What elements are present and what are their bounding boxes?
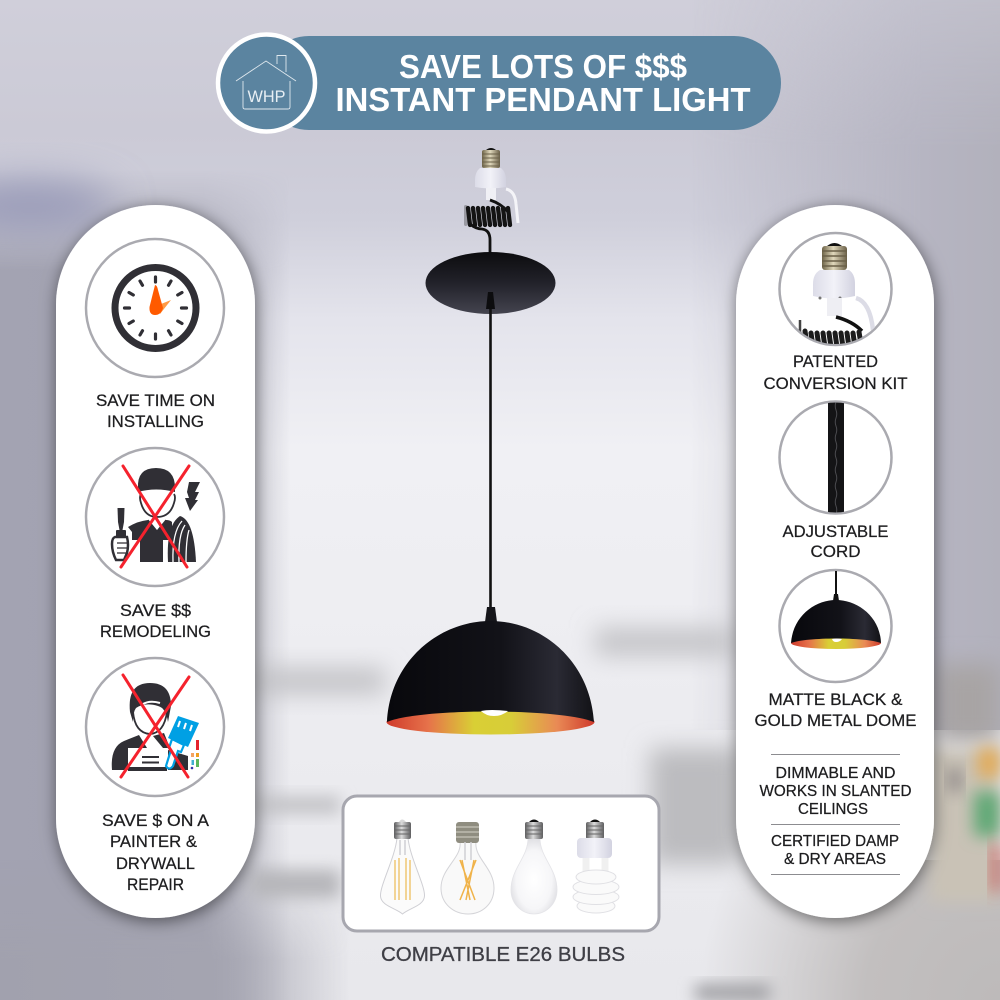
panel: right features bbox=[736, 205, 934, 918]
conversion kit bbox=[464, 148, 518, 254]
dome shade bbox=[386, 607, 594, 734]
photo: dome bbox=[780, 570, 892, 682]
banner bbox=[218, 34, 781, 132]
label: dimmable: CEILINGS bbox=[798, 801, 868, 818]
label: save on painter: PAINTER & bbox=[110, 832, 198, 851]
label: conversion kit: CONVERSION KIT bbox=[764, 374, 908, 393]
title: INSTANT PENDANT LIGHT bbox=[336, 81, 750, 118]
canopy bbox=[426, 252, 556, 314]
photo: conversion kit bbox=[780, 233, 892, 347]
cord grip bbox=[486, 292, 495, 309]
icon: crossed-out painter bbox=[86, 658, 224, 796]
label: dome: GOLD METAL DOME bbox=[754, 711, 916, 730]
label: certified: & DRY AREAS bbox=[784, 851, 886, 868]
label: save remodeling: SAVE $$ bbox=[120, 601, 192, 620]
bulb: frosted bbox=[511, 820, 557, 914]
icon: clock bbox=[86, 239, 224, 377]
bulb: A-type filament bbox=[441, 822, 494, 914]
logo badge: WHP bbox=[248, 87, 286, 106]
label: save on painter: DRYWALL bbox=[116, 854, 195, 873]
label: dimmable: WORKS IN SLANTED bbox=[760, 783, 912, 800]
panel: left benefits bbox=[56, 205, 255, 918]
label: save time: INSTALLING bbox=[107, 412, 204, 431]
label: adjustable cord: ADJUSTABLE bbox=[782, 522, 888, 541]
label: conversion kit: PATENTED bbox=[793, 352, 878, 371]
label: save on painter: REPAIR bbox=[127, 875, 184, 894]
icon: crossed-out electrician bbox=[86, 448, 224, 586]
bulb: CFL spiral bbox=[573, 820, 619, 913]
label: dimmable: DIMMABLE AND bbox=[776, 765, 896, 782]
cord bbox=[489, 296, 492, 612]
label: dome: MATTE BLACK & bbox=[768, 690, 903, 709]
label: save time: SAVE TIME ON bbox=[96, 391, 215, 410]
label: save on painter: SAVE $ ON A bbox=[102, 811, 210, 830]
photo: adjustable cord bbox=[780, 400, 892, 515]
pendant light product bbox=[386, 148, 594, 734]
label: compatible bulbs: COMPATIBLE E26 BULBS bbox=[381, 944, 625, 966]
bulb: ST edison bbox=[380, 820, 425, 914]
label: save remodeling: REMODELING bbox=[100, 622, 211, 641]
title: SAVE LOTS OF $$$ bbox=[399, 48, 687, 85]
label: adjustable cord: CORD bbox=[810, 542, 860, 561]
banner bar bbox=[262, 36, 781, 130]
panel: compatible bulbs bbox=[343, 796, 659, 931]
logo badge bbox=[218, 34, 315, 132]
label: certified: CERTIFIED DAMP bbox=[771, 833, 899, 850]
